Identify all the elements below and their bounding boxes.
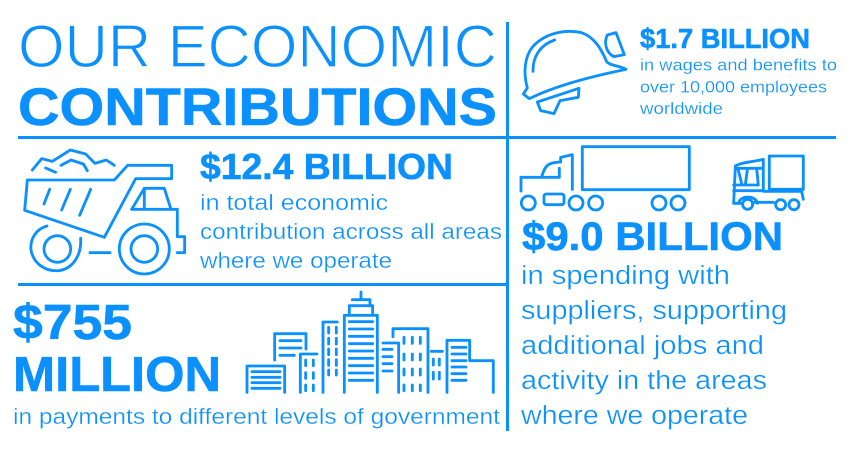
stat: wages: in wages and benefits to [640, 56, 837, 74]
title: CONTRIBUTIONS [18, 78, 497, 137]
stat: wages [639, 23, 837, 118]
stat: supplier spending: activity in the areas [521, 367, 767, 395]
stat: wages: over 10,000 employees [640, 78, 827, 96]
stat: supplier spending: in spending with [521, 262, 730, 290]
stat: total contribution: $12.4 BILLION [200, 146, 453, 187]
title [18, 13, 497, 137]
stat: total contribution: contribution across all areas [200, 219, 502, 244]
icon: hard hat [523, 31, 626, 114]
title: OUR ECONOMIC [18, 13, 497, 80]
stat: supplier spending: suppliers, supporting [521, 297, 787, 325]
stat: supplier spending [520, 215, 787, 430]
stat: supplier spending: where we operate [520, 402, 748, 430]
stat: wages: $1.7 BILLION [640, 23, 810, 54]
icon: mining dump truck [25, 150, 185, 274]
stat: total contribution [199, 146, 502, 273]
stat: total contribution: where we operate [199, 248, 392, 273]
icon: semi truck [521, 147, 689, 210]
stat: government payments [13, 296, 501, 429]
stat: supplier spending: additional jobs and [521, 332, 764, 360]
stat: government payments: MILLION [13, 348, 221, 402]
stat: total contribution: in total economic [200, 190, 388, 215]
icon: small delivery truck [734, 156, 803, 210]
stat: supplier spending: $9.0 BILLION [522, 215, 783, 259]
icon: city skyline [247, 292, 493, 392]
stat: government payments: $755 [13, 296, 132, 350]
stat: wages: worldwide [639, 99, 723, 118]
stat: government payments: in payments to different levels of government [13, 404, 501, 429]
